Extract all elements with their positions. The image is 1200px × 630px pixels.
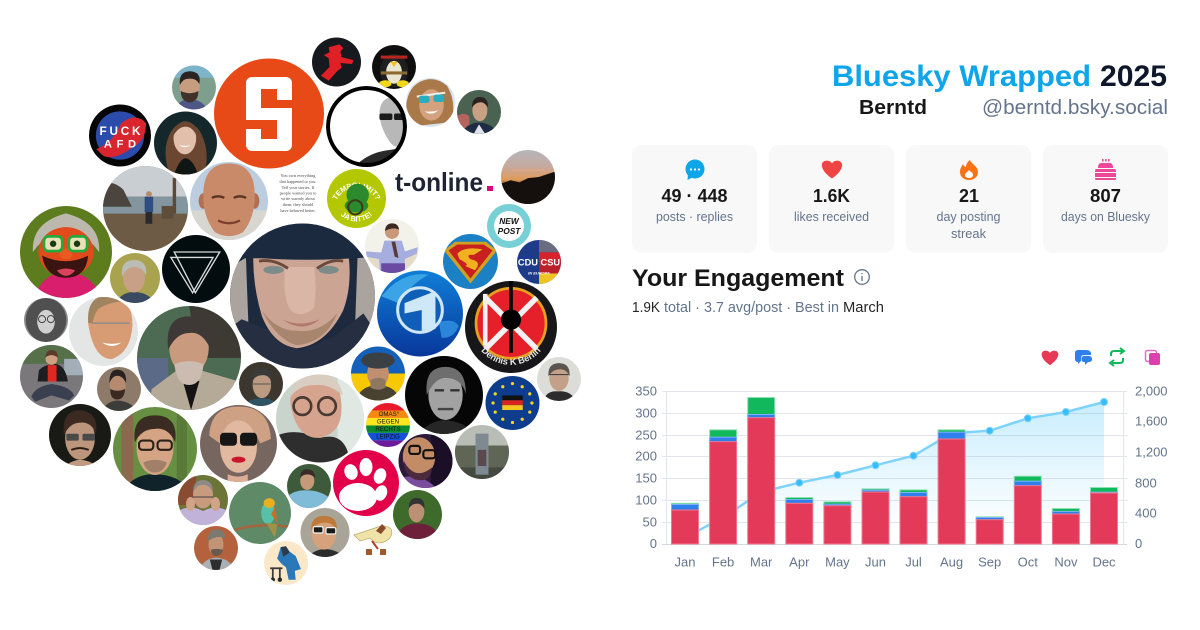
left axis labels: 350 bbox=[635, 384, 657, 398]
left axis labels: 150 bbox=[635, 470, 657, 486]
right axis labels: 2,000 bbox=[1135, 384, 1168, 398]
avatar: Dennis K Berlin badge bbox=[465, 281, 557, 373]
stat card: days on Bluesky: 807 bbox=[1090, 185, 1121, 206]
avatar: Batman with walker bbox=[264, 541, 308, 585]
engagement summary text: total · 3.7 avg/post · Best in bbox=[664, 300, 839, 316]
avatar: Tagesschau globe bbox=[377, 270, 463, 356]
avatar: Omas gegen Rechts rainbow: RECHTS bbox=[375, 426, 401, 433]
stat card: likes received: 1.6K bbox=[813, 185, 851, 206]
avatar: man against brick wall bbox=[194, 526, 238, 570]
avatar: CDU CSU in Europa: IN EUROPA bbox=[528, 270, 550, 275]
bars: red likes bbox=[672, 418, 1118, 544]
avatar: young man in dark jacket bbox=[457, 90, 501, 134]
avatar: Fuck AfD badge bbox=[89, 104, 151, 166]
avatar: man in light blue shirt bbox=[287, 464, 331, 508]
stat card: posts and replies: 49 · 448 bbox=[662, 185, 728, 206]
stat card: day posting streak: 21 bbox=[959, 185, 979, 206]
avatar: person on lake shore bbox=[103, 166, 188, 251]
engagement summary text: 1.9K bbox=[632, 300, 660, 316]
avatar: Omas gegen Rechts rainbow: OMAS° bbox=[379, 411, 400, 418]
month labels bbox=[675, 554, 1116, 570]
avatar: grey man with glasses bbox=[537, 357, 581, 401]
avatar: man with beard, purple light bbox=[398, 434, 452, 488]
avatar: text quote card bbox=[269, 165, 327, 223]
avatar: Berlin Wall segment bbox=[455, 425, 509, 479]
stacked bars bbox=[672, 398, 1118, 544]
avatar: text quote card: people wanted you to bbox=[280, 190, 316, 196]
heading: Your Engagement: Your Engagement bbox=[632, 265, 844, 292]
avatar: text quote card: You own everything bbox=[281, 173, 316, 178]
avatar: t-online wordmark: t-online bbox=[395, 167, 483, 197]
avatar: New Post teal badge: NEW bbox=[499, 216, 520, 226]
avatar: man with moustache, dark background bbox=[49, 404, 111, 466]
avatar: bearded man in dark sweater bbox=[97, 367, 141, 411]
avatar: EU flag with German flag bbox=[486, 376, 540, 430]
month labels: Oct bbox=[1018, 554, 1038, 570]
month labels: Aug bbox=[940, 554, 963, 570]
avatar: woman with long brown hair bbox=[154, 112, 217, 174]
stat card: day posting streak: day posting bbox=[936, 209, 1000, 224]
avatar bubble cloud bbox=[20, 38, 581, 585]
avatar: Tempolimit sticker: TEMPOLIMIT? bbox=[332, 182, 380, 199]
stat card: day posting streak: streak bbox=[951, 226, 986, 241]
stat card: likes received bbox=[769, 145, 894, 253]
avatar: Omas gegen Rechts rainbow: LEIPZIG bbox=[376, 434, 400, 441]
avatar: curly haired woman black and white bbox=[24, 298, 68, 342]
profile name and handle: @berntd.bsky.social bbox=[982, 96, 1168, 119]
month labels: Nov bbox=[1054, 554, 1078, 570]
right axis labels bbox=[1135, 384, 1168, 551]
left axis labels: 250 bbox=[635, 428, 657, 442]
avatar: smiling man with rimless glasses bbox=[69, 297, 138, 366]
month labels: Apr bbox=[789, 554, 810, 570]
avatar: Omas gegen Rechts rainbow: GEGEN bbox=[377, 419, 399, 426]
left axis labels: 300 bbox=[635, 406, 657, 420]
avatar: grey haired man bbox=[110, 253, 160, 303]
avatar: black with white triangles bbox=[162, 235, 230, 303]
left axis labels: 0 bbox=[650, 536, 657, 551]
avatar: man in maroon shirt bbox=[393, 490, 442, 539]
chart legend icons bbox=[1042, 348, 1160, 366]
stat card: days on Bluesky: days on Bluesky bbox=[1061, 209, 1150, 224]
avatar: text quote card: that happened to you. bbox=[280, 179, 316, 184]
avatar: New Post teal badge: POST bbox=[498, 226, 521, 236]
profile name and handle bbox=[859, 96, 1168, 119]
stat card: posts and replies bbox=[632, 145, 757, 253]
avatar: Omas gegen Rechts rainbow bbox=[366, 403, 410, 447]
avatar: red haired man with white sunglasses bbox=[300, 508, 350, 557]
avatar: Fuck AfD badge: AFD bbox=[104, 138, 136, 150]
avatar: sunset over trees bbox=[501, 150, 555, 204]
month labels: Jul bbox=[905, 554, 922, 570]
avatar: man with beard, coast behind bbox=[172, 66, 216, 110]
month labels: Feb bbox=[712, 554, 734, 570]
left axis labels: 50 bbox=[643, 514, 657, 530]
avatar: black and white man in ring bbox=[326, 86, 407, 167]
right axis labels: 400 bbox=[1135, 506, 1157, 520]
avatar: woman sitting on street bbox=[20, 345, 83, 408]
month labels: Sep bbox=[978, 554, 1001, 570]
right axis labels: 1,200 bbox=[1135, 444, 1168, 460]
icon: quote squares bbox=[1146, 350, 1160, 365]
avatar: text quote card: write warmly about bbox=[281, 196, 316, 201]
avatar: black and white portrait bbox=[405, 356, 483, 434]
avatar: text quote card: them, they should bbox=[283, 202, 314, 208]
avatar: orange muppet with green glasses bbox=[20, 206, 112, 298]
avatar: Dennis K Berlin badge: Dennis K Berlin bbox=[481, 347, 541, 365]
avatar: man with glasses in forest bbox=[113, 407, 197, 491]
avatar: Fuck AfD badge: FUCK bbox=[100, 125, 141, 138]
left axis labels bbox=[635, 384, 657, 551]
icon: heart likes bbox=[1042, 351, 1058, 365]
avatar: bee-eater bird on branch bbox=[229, 482, 291, 544]
avatar: white paw on red bbox=[333, 450, 399, 516]
right axis labels: 1,600 bbox=[1135, 414, 1168, 428]
title: Bluesky Wrapped 2025: 2025 bbox=[1100, 60, 1167, 93]
chart grid bbox=[662, 391, 1127, 544]
avatar: Superman shield bbox=[443, 234, 498, 289]
avatar: CDU CSU in Europa: CDU CSU bbox=[518, 258, 560, 268]
cumulative area and line bbox=[685, 398, 1108, 544]
avatar: New Post teal badge bbox=[487, 204, 531, 248]
avatar: man in beige jacket bbox=[137, 306, 241, 410]
avatar: main hooded portrait bbox=[230, 224, 375, 368]
left axis labels: 100 bbox=[635, 492, 657, 508]
avatar: text quote card: Tell your stories. If bbox=[282, 185, 315, 190]
avatar: orange S logo bbox=[214, 58, 324, 168]
avatar: blonde woman with black sunglasses bbox=[200, 405, 277, 482]
month labels: Jan bbox=[675, 554, 695, 570]
stat card: days on Bluesky bbox=[1043, 145, 1168, 253]
profile name and handle: Berntd bbox=[859, 96, 927, 119]
avatar: Tempolimit sticker: JA BITTE! bbox=[341, 212, 372, 222]
avatar: man with tie reclining bbox=[365, 219, 419, 273]
avatar: man with cap on Ukrainian flag bbox=[351, 346, 405, 400]
title: Bluesky Wrapped 2025: Bluesky Wrapped bbox=[832, 60, 1091, 93]
avatar: bald man smiling bbox=[190, 162, 268, 240]
combined chart: monthly engagement bars and cumulative line bbox=[635, 384, 1168, 570]
avatar: text quote card: have behaved better. bbox=[280, 208, 316, 213]
right axis labels: 0 bbox=[1135, 536, 1142, 551]
month labels: Jun bbox=[865, 554, 886, 570]
stat card: day posting streak bbox=[906, 145, 1031, 253]
avatar: woman with teal sunglasses bbox=[406, 78, 455, 127]
stat card: posts and replies: posts · replies bbox=[656, 209, 733, 224]
avatar: man with dark curly hair and glasses bbox=[239, 362, 283, 406]
bars: blue replies bbox=[672, 414, 1118, 520]
avatar: post horn illustration bbox=[354, 524, 392, 555]
avatar: man with hands on cheeks bbox=[178, 475, 228, 525]
icon: repost arrows bbox=[1110, 348, 1124, 366]
left axis labels: 200 bbox=[635, 448, 657, 464]
avatar: CDU CSU in Europa bbox=[517, 240, 561, 284]
month labels: Mar bbox=[750, 554, 773, 570]
avatar: elderly man with glasses bbox=[276, 374, 364, 462]
avatar: Tempolimit sticker bbox=[327, 169, 386, 228]
engagement summary text: March bbox=[843, 300, 884, 316]
icon: reply bubbles bbox=[1075, 350, 1092, 365]
month labels: May bbox=[825, 554, 850, 570]
icon: info bbox=[855, 270, 869, 284]
avatar: Tux penguin bbox=[372, 45, 416, 89]
right axis labels: 800 bbox=[1135, 476, 1157, 490]
bars: green reposts bbox=[672, 398, 1118, 519]
month labels: Dec bbox=[1092, 554, 1116, 570]
stat card: likes received: likes received bbox=[794, 209, 869, 224]
avatar: red Ampelmann bbox=[312, 38, 361, 86]
